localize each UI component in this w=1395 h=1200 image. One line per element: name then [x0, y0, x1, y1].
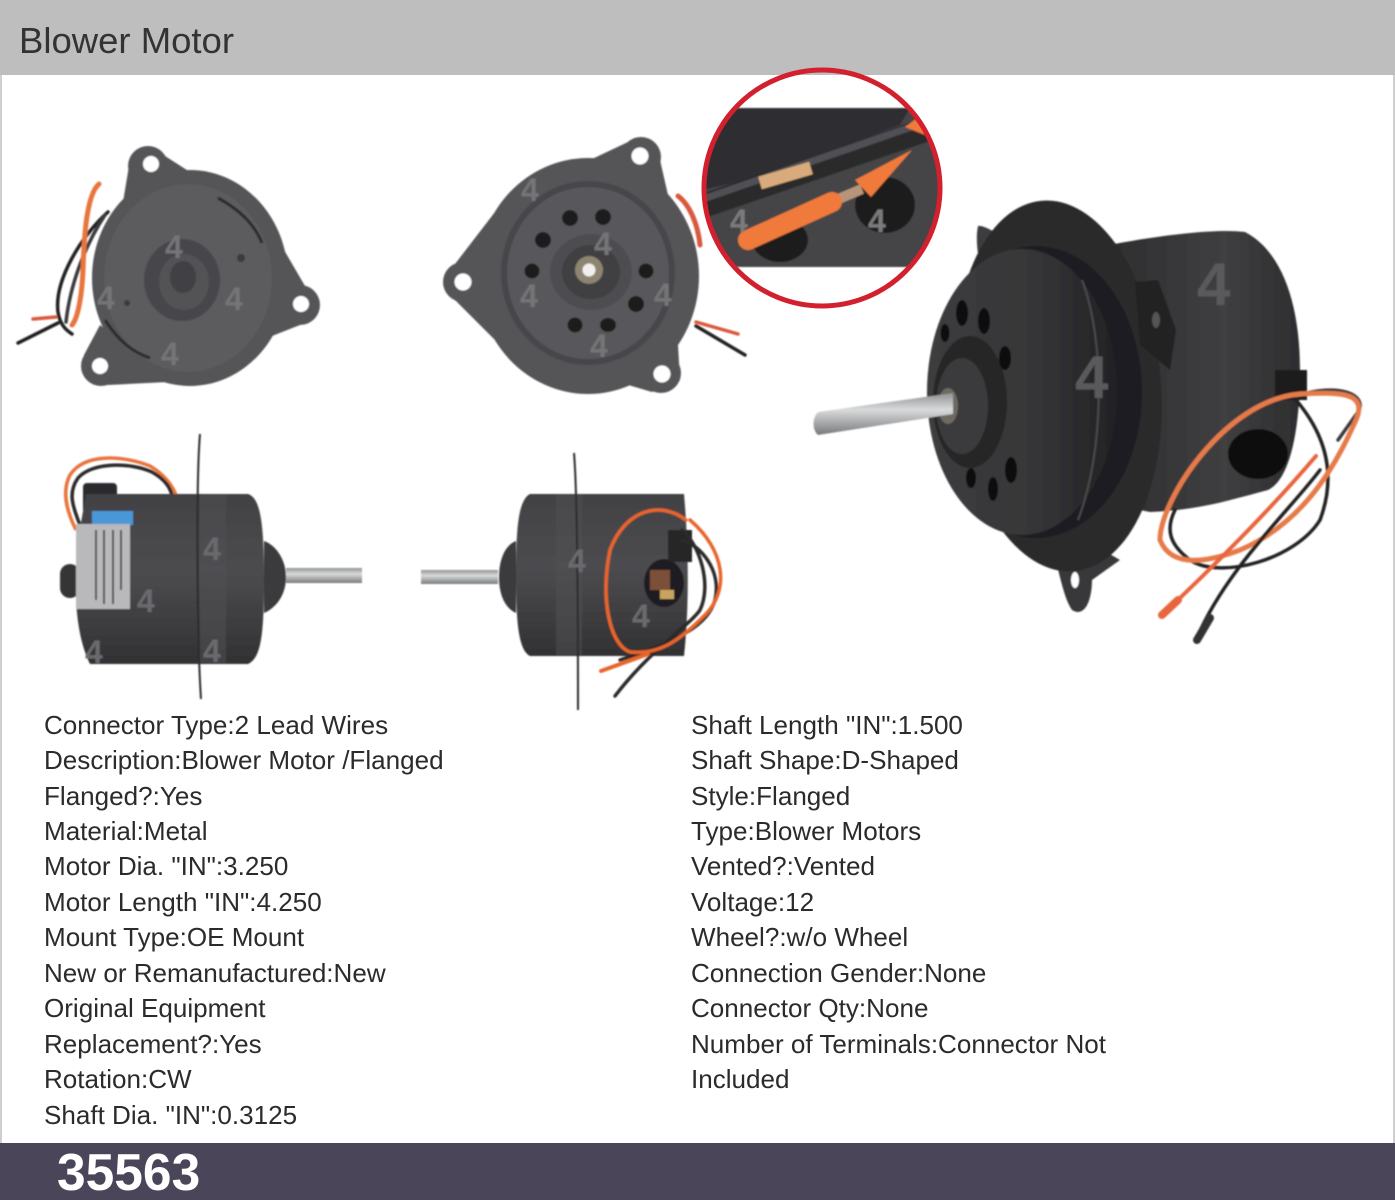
orange wire end: [748, 202, 832, 240]
specifications left column: Original Equipment: [44, 993, 266, 1023]
watermarks: [568, 543, 650, 634]
flange disc: [939, 192, 1177, 580]
specifications left column: Motor Dia. "IN":3.250: [44, 851, 288, 881]
specifications right column: Connection Gender:None: [691, 958, 986, 988]
watermarks: 4: [85, 634, 103, 670]
black wires: [700, 130, 925, 207]
specifications right column: Vented?:Vented: [691, 851, 875, 881]
vent holes: [940, 300, 1017, 501]
footer bar with part number: [0, 1143, 1395, 1200]
wires: [66, 458, 176, 530]
specifications right column: [691, 710, 1106, 1094]
motor right side view: [421, 453, 721, 710]
motor left side view: [60, 434, 362, 699]
product photo illustrations: [15, 68, 1363, 711]
watermarks: [1075, 251, 1231, 411]
specifications right column: Voltage:12: [691, 887, 814, 917]
motor rear view: [18, 146, 320, 386]
watermarks: 4: [1197, 251, 1231, 318]
watermarks: [520, 172, 672, 364]
mount holes: [632, 148, 648, 164]
specifications right column: Type:Blower Motors: [691, 816, 921, 846]
callout: wire detail inset: [700, 70, 945, 306]
watermarks: 4: [568, 543, 586, 579]
flange with ears: [81, 146, 320, 386]
flange with ears: [443, 137, 699, 394]
hub and bearing: [550, 234, 632, 310]
terminal window: [644, 559, 684, 607]
callout: wire detail inset: 4: [868, 203, 886, 239]
watermarks: [85, 531, 221, 670]
specifications left column: Shaft Dia. "IN":0.3125: [44, 1100, 297, 1130]
bottom ear: [1048, 525, 1120, 612]
watermarks: 4: [1075, 344, 1109, 411]
watermarks: 4: [203, 531, 221, 567]
footer bar with part number: 35563: [57, 1143, 200, 1200]
specifications left column: Material:Metal: [44, 816, 208, 846]
specifications left column: Replacement?:Yes: [44, 1029, 262, 1059]
flange edge: [197, 434, 201, 699]
connector: [1275, 370, 1307, 400]
watermarks: 4: [165, 229, 183, 265]
watermarks: 4: [590, 328, 608, 364]
watermarks: 4: [225, 281, 243, 317]
specifications left column: [44, 710, 444, 1130]
wires: [601, 510, 721, 696]
specifications left column: Description:Blower Motor /Flanged: [44, 745, 444, 775]
flange edge: [574, 453, 578, 710]
specifications right column: Wheel?:w/o Wheel: [691, 922, 908, 952]
red circle: [704, 70, 940, 306]
wires: [678, 196, 745, 355]
watermarks: 4: [730, 203, 748, 239]
specifications left column: Flanged?:Yes: [44, 780, 202, 810]
wires: [1160, 390, 1360, 640]
watermarks: 4: [520, 278, 538, 314]
label: [92, 511, 133, 525]
left ear: [977, 226, 1012, 290]
specifications right column: Number of Terminals:Connector Not: [691, 1029, 1106, 1059]
watermarks: 4: [521, 172, 539, 208]
specifications left column: New or Remanufactured:New: [44, 958, 386, 988]
specifications right column: Shaft Shape:D-Shaped: [691, 745, 959, 775]
specifications right column: Style:Flanged: [691, 780, 850, 810]
stripped copper: [760, 168, 811, 183]
watermarks: 4: [97, 280, 115, 316]
watermarks: 4: [632, 598, 650, 634]
specifications right column: Shaft Length "IN":1.500: [691, 710, 963, 740]
connector: [83, 483, 117, 513]
front hub: [264, 541, 286, 613]
rear can: [1085, 231, 1300, 512]
specifications left column: Connector Type:2 Lead Wires: [44, 710, 388, 740]
watermarks: 4: [654, 277, 672, 313]
watermarks: [97, 229, 243, 372]
shaft: [286, 568, 362, 583]
specifications left column: Rotation:CW: [44, 1064, 192, 1094]
dome: [930, 246, 1142, 538]
hub: [144, 239, 220, 321]
hub: [933, 336, 1007, 468]
specifications left column: Mount Type:OE Mount: [44, 922, 304, 952]
front hub: [499, 541, 516, 613]
header bar with title: Blower Motor: [19, 20, 234, 61]
watermarks: 4: [137, 583, 155, 619]
shaft: [814, 393, 953, 435]
terminal window: [1228, 429, 1288, 479]
main motor photo: [814, 192, 1360, 640]
specifications left column: Motor Length "IN":4.250: [44, 887, 322, 917]
wires: [18, 184, 108, 343]
vent holes: [524, 209, 654, 332]
shaft: [421, 570, 498, 584]
mount holes: [143, 156, 159, 172]
watermarks: 4: [161, 336, 179, 372]
specifications right column: Included: [691, 1064, 789, 1094]
inner plate: [104, 184, 272, 372]
header bar with title: [0, 0, 1395, 75]
watermarks: 4: [594, 226, 612, 262]
watermarks: 4: [203, 633, 221, 669]
body: [516, 494, 688, 656]
inset photo background: [700, 108, 945, 267]
body: [76, 494, 264, 664]
connector: [668, 530, 692, 562]
bearing: [938, 388, 958, 424]
motor front view: [443, 137, 745, 394]
specifications right column: Connector Qty:None: [691, 993, 928, 1023]
